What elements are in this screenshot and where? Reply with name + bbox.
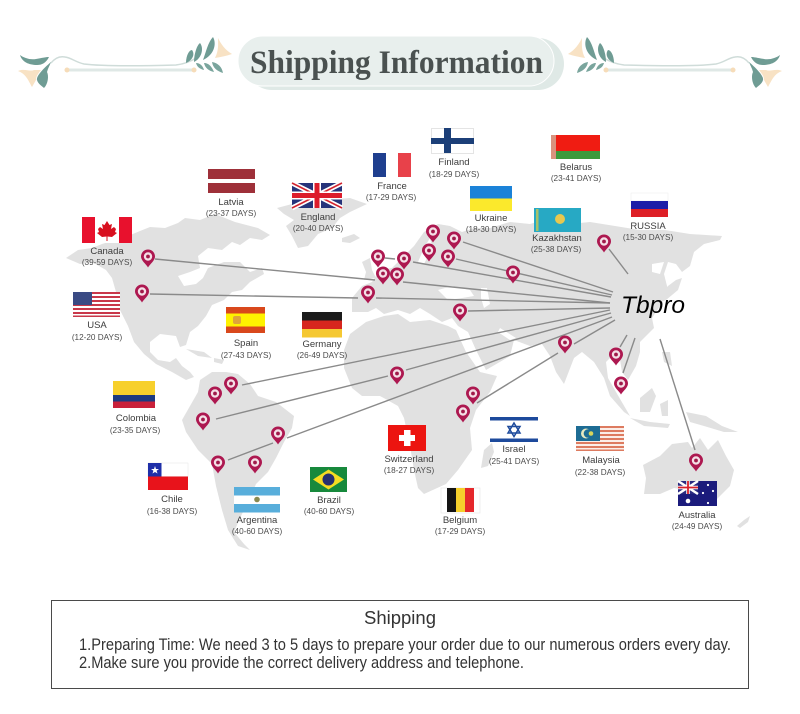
Chile flag and label: Chile	[161, 494, 183, 505]
Australia	[643, 438, 734, 500]
title pill	[238, 36, 564, 90]
destination map pins	[135, 224, 703, 474]
note 2: 2.Make sure you provide the correct delivery address and telephone.	[79, 654, 524, 672]
Australia flag and label: Australia	[679, 510, 716, 521]
Greenland	[277, 198, 367, 248]
Malaysia flag and label: Malaysia	[582, 455, 620, 466]
Colombia flag and label: Colombia	[116, 413, 157, 424]
Argentina flag and label: (40-60 DAYS)	[232, 527, 282, 536]
Borneo	[640, 388, 656, 412]
Canada flag and label: Canada	[90, 246, 124, 257]
France flag and label	[366, 153, 416, 202]
Malaysia flag and label	[575, 426, 625, 477]
header banner	[18, 36, 782, 90]
Belgium flag and label	[435, 488, 485, 536]
USA flag and label	[72, 292, 122, 342]
Philippines	[662, 352, 672, 366]
Brazil flag and label	[304, 467, 354, 516]
Belarus flag and label	[551, 135, 601, 183]
Spain flag and label	[221, 307, 271, 360]
France flag and label: (17-29 DAYS)	[366, 193, 416, 202]
England flag and label: (20-40 DAYS)	[293, 224, 343, 233]
USA flag and label: (12-20 DAYS)	[72, 333, 122, 342]
Australia flag and label: (24-49 DAYS)	[672, 522, 722, 531]
Belgium flag and label: Belgium	[443, 515, 477, 526]
Israel flag and label	[489, 417, 539, 466]
Black Sea	[438, 286, 474, 300]
USA flag and label: USA	[87, 320, 107, 331]
Colombia flag and label	[110, 381, 160, 435]
Spain flag and label: (27-43 DAYS)	[221, 351, 271, 360]
Germany flag and label	[297, 312, 347, 360]
North America	[66, 214, 270, 380]
Ukraine flag and label	[466, 186, 516, 234]
Russia flag and label: RUSSIA	[630, 221, 666, 232]
Brazil flag and label: (40-60 DAYS)	[304, 507, 354, 516]
Spain flag and label: Spain	[234, 338, 258, 349]
Finland flag and label	[429, 128, 479, 179]
Switzerland flag and label: Switzerland	[384, 454, 434, 465]
Kazakhstan flag and label	[531, 208, 582, 254]
Sumatra and Java	[630, 400, 670, 428]
New Guinea	[686, 412, 738, 432]
world map	[66, 198, 750, 550]
Japan	[656, 278, 682, 304]
Finland flag and label: Finland	[438, 157, 470, 168]
Belgium flag and label: (17-29 DAYS)	[435, 527, 485, 536]
Finland flag and label: (18-29 DAYS)	[429, 170, 479, 179]
hub label: Tbpro: Tbpro	[621, 292, 685, 319]
shipping notes panel	[52, 600, 748, 688]
title: Shipping Information	[250, 45, 543, 81]
Belarus flag and label: Belarus	[560, 162, 592, 173]
Malaysia flag and label: (22-38 DAYS)	[575, 468, 625, 477]
Madagascar	[481, 443, 494, 468]
England flag and label	[292, 183, 343, 233]
Chile flag and label: (16-38 DAYS)	[147, 507, 197, 516]
Sea of Okhotsk	[652, 262, 664, 274]
Switzerland flag and label	[384, 425, 434, 475]
Ukraine flag and label: Ukraine	[475, 213, 507, 224]
South America	[182, 372, 294, 550]
Latvia flag and label	[206, 169, 256, 218]
Kazakhstan flag and label: (25-38 DAYS)	[531, 245, 581, 254]
Canada flag and label	[82, 217, 132, 267]
panel heading: Shipping	[364, 608, 436, 628]
Israel flag and label: (25-41 DAYS)	[489, 457, 539, 466]
Russia flag and label: (15-30 DAYS)	[623, 233, 673, 242]
Baltic Sea	[418, 238, 432, 264]
decorative right floral ornament	[568, 37, 782, 88]
Argentina flag and label: Argentina	[237, 515, 278, 526]
Africa	[344, 314, 497, 494]
note 1: 1.Preparing Time: We need 3 to 5 days to prepare your order due to our numerous orders every day.	[79, 636, 731, 654]
shipping route lines from hub	[150, 242, 695, 460]
Germany flag and label: (26-49 DAYS)	[297, 351, 347, 360]
Argentina flag and label	[232, 487, 282, 536]
New Zealand	[737, 516, 750, 528]
Latvia flag and label: Latvia	[218, 197, 244, 208]
Colombia flag and label: (23-35 DAYS)	[110, 426, 160, 435]
Caspian Sea	[481, 288, 490, 308]
Eurasia	[352, 218, 722, 416]
Chile flag and label	[147, 463, 197, 516]
Israel flag and label: Israel	[502, 444, 526, 455]
Australia flag and label	[672, 481, 722, 531]
Russia flag and label	[623, 193, 673, 242]
Persian Gulf	[498, 328, 516, 340]
Iceland	[342, 234, 360, 243]
Ukraine flag and label: (18-30 DAYS)	[466, 225, 516, 234]
Cuba and Caribbean	[186, 349, 224, 364]
United Kingdom	[362, 258, 376, 280]
Brazil flag and label: Brazil	[317, 495, 341, 506]
France flag and label: France	[377, 181, 407, 192]
Kazakhstan flag and label: Kazakhstan	[532, 233, 582, 244]
England flag and label: England	[301, 212, 335, 223]
Switzerland flag and label: (18-27 DAYS)	[384, 466, 434, 475]
decorative left floral ornament	[18, 37, 232, 88]
Germany flag and label: Germany	[302, 339, 342, 350]
Latvia flag and label: (23-37 DAYS)	[206, 209, 256, 218]
Canada flag and label: (39-59 DAYS)	[82, 258, 132, 267]
Belarus flag and label: (23-41 DAYS)	[551, 174, 601, 183]
